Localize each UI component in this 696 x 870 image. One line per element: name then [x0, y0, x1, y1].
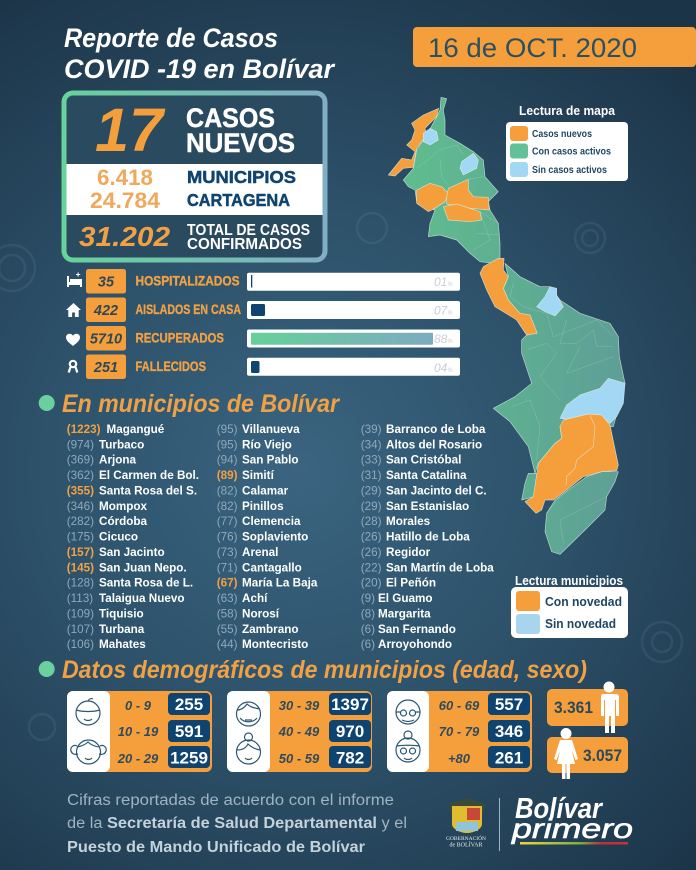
- list: municipality column 1: Mompox: [99, 500, 148, 513]
- row: recuperados: [86, 326, 460, 350]
- municipios and cartagena numbers: 6.418: [97, 165, 153, 190]
- list: municipality column 3: (28): [361, 515, 382, 528]
- row: fallecidos: 04%: [434, 361, 453, 375]
- panel: ages 60+: 70 - 79: [439, 724, 480, 739]
- list: municipality column 3: Regidor: [386, 546, 431, 559]
- row: fallecidos: 251: [93, 360, 118, 376]
- panel: ages 30-59: 30 - 39: [279, 698, 320, 713]
- icon: boy face: [76, 699, 100, 725]
- panel: men total: [547, 682, 628, 733]
- footer note: Puesto de Mando Unificado de Bolívar: [67, 839, 365, 856]
- list: municipality column 1: (175): [67, 531, 94, 544]
- logo: Bolívar Primero: primero: [511, 813, 633, 844]
- list: municipality column 2: (89): [217, 469, 238, 482]
- list: municipality column 3: San Estanislao: [386, 500, 469, 513]
- list: municipality column 3: (9): [361, 592, 375, 605]
- list: municipality column 1: Arjona: [99, 454, 137, 467]
- list: municipality column 3: Morales: [386, 515, 431, 528]
- legend: municipios: Con novedad: [545, 594, 622, 609]
- list: municipality column 2: Clemencia: [242, 515, 301, 528]
- list: municipality column 3: (39): [361, 423, 382, 436]
- list: municipality column 2: María La Baja: [242, 577, 318, 590]
- row: aislados en casa: AISLADOS EN CASA: [136, 302, 241, 317]
- row: recuperados: 5710: [90, 332, 122, 348]
- list: municipality column 2: San Pablo: [242, 454, 299, 467]
- list: municipality column 1: San Jacinto: [99, 546, 165, 559]
- title: COVID -19 en Bolívar: [64, 54, 335, 84]
- panel: women total: [547, 728, 628, 779]
- list: municipality column 1: Turbaco: [99, 438, 144, 451]
- panel: ages 60+: 60 - 69: [439, 698, 480, 713]
- list: municipality column 3: (29): [361, 500, 382, 513]
- list: municipality column 2: Río Viejo: [242, 438, 292, 451]
- panel: status rows: [66, 269, 460, 379]
- heading: datos demográficos: Datos demográficos de municipios (edad, sexo): [62, 656, 587, 684]
- icon: bed: [67, 272, 82, 287]
- list: municipality column 3: (34): [361, 438, 382, 451]
- legend: map: Lectura de mapa: [519, 104, 616, 118]
- logo: gobernación de Bolívar: GOBERNACIÓN: [446, 834, 486, 842]
- list: municipality column 2: (76): [217, 531, 238, 544]
- list: municipality column 1: (282): [67, 515, 94, 528]
- list: municipality column 2: (82): [217, 484, 238, 498]
- list: municipality column 1: Santa Rosa de L.: [99, 577, 193, 590]
- list: municipality column 1: Mahates: [99, 638, 146, 651]
- logo: gobernación de Bolívar: de BOLÍVAR: [449, 840, 483, 848]
- panel: men total: 3.361: [554, 698, 593, 717]
- list: municipality column 3: San Fernando: [378, 623, 456, 636]
- list: municipality column 2: (67): [217, 577, 238, 590]
- list: municipality column 1: (369): [67, 454, 94, 467]
- logo: Bolívar Primero: [511, 793, 633, 844]
- list: municipality column 3: Arroyohondo: [378, 638, 452, 651]
- list: municipality column 1: (362): [67, 469, 94, 482]
- municipios and cartagena labels: MUNICIPIOS: [187, 167, 296, 187]
- panel: ages 30-59: 50 - 59: [279, 751, 320, 766]
- panel: ages 0-29: 591: [175, 722, 203, 741]
- row: recuperados: RECUPERADOS: [136, 330, 224, 346]
- icon: man: [601, 682, 619, 733]
- list: municipality column 2: (58): [217, 607, 238, 620]
- list: municipality column 3: (31): [361, 469, 382, 482]
- row: aislados en casa: 07%: [434, 304, 453, 318]
- list: municipality column 1: (113): [67, 592, 93, 605]
- panel: ages 60+: +80: [448, 751, 471, 766]
- legend: municipios: Lectura municipios: [515, 574, 623, 588]
- panel: ages 60+: 557: [495, 695, 523, 714]
- list: municipality column 2: Montecristo: [242, 638, 308, 651]
- panel: ages 60+: 346: [495, 722, 523, 741]
- new cases label: NUEVOS: [186, 128, 295, 158]
- list: municipality column 3: (26): [361, 546, 382, 559]
- date banner: 16 de OCT. 2020: [428, 33, 637, 63]
- logo: Bolívar Primero: Bolívar: [515, 793, 604, 825]
- list: municipality column 2: (95): [217, 423, 238, 436]
- title: [64, 23, 335, 84]
- list: municipality column 1: Magangué: [106, 423, 165, 436]
- list: municipality column 1: [67, 423, 199, 651]
- legend: map: [506, 104, 628, 181]
- title: Reporte de Casos: [64, 23, 278, 53]
- row: aislados en casa: [86, 298, 460, 322]
- panel: ages 0-29: 255: [175, 695, 203, 714]
- date banner: [413, 27, 696, 67]
- panel: ages 60+: [387, 691, 532, 772]
- panel: ages 0-29: [67, 691, 212, 772]
- list: municipality column 2: (94): [217, 454, 238, 467]
- list: municipality column 1: Talaigua Nuevo: [99, 592, 185, 605]
- list: municipality column 3: San Martín de Loba: [386, 561, 494, 574]
- list: municipality column 1: (128): [67, 577, 94, 590]
- list: municipality column 1: (355): [67, 484, 94, 498]
- list: municipality column 1: Córdoba: [99, 515, 148, 528]
- list: municipality column 3: Barranco de Loba: [386, 423, 486, 436]
- list: municipality column 1: (109): [67, 607, 94, 620]
- row: hospitalizados: 35: [98, 274, 115, 290]
- list: municipality column 2: (71): [217, 561, 238, 574]
- list: municipality column 2: (77): [217, 515, 238, 528]
- list: municipality column 1: Cicuco: [99, 531, 138, 544]
- footer note: [67, 792, 407, 856]
- list: municipality column 3: (22): [361, 561, 382, 574]
- row: aislados en casa: 422: [93, 303, 118, 319]
- logo: gobernación de Bolívar: [446, 798, 486, 848]
- list: municipality column 3: (20): [361, 577, 382, 590]
- list: municipality column 1: (106): [67, 638, 94, 651]
- list: municipality column 1: (157): [67, 546, 94, 559]
- list: municipality column 3: [361, 423, 494, 651]
- panel: ages 60+: 261: [495, 748, 523, 768]
- row: fallecidos: [86, 354, 460, 379]
- list: municipality column 1: El Carmen de Bol.: [99, 469, 199, 482]
- list: municipality column 2: Cantagallo: [242, 561, 302, 574]
- footer note: de la Secretaría de Salud Departamental y el: [67, 815, 407, 832]
- municipios and cartagena numbers: 24.784: [90, 188, 161, 213]
- new cases number: 17: [95, 96, 166, 164]
- legend: map: Sin casos activos: [532, 164, 607, 176]
- list: municipality column 3: Santa Catalina: [386, 469, 467, 482]
- panel: ages 30-59: 782: [336, 748, 364, 768]
- row: recuperados: 88%: [434, 332, 453, 346]
- list: municipality column 2: Villanueva: [242, 423, 300, 436]
- heading: en municipios: En municipios de Bolívar: [62, 390, 340, 418]
- panel: ages 30-59: 970: [336, 722, 364, 741]
- row: fallecidos: FALLECIDOS: [136, 359, 206, 374]
- panel: case totals: [64, 93, 325, 260]
- new cases label: CASOS: [186, 103, 275, 133]
- list: municipality column 1: San Juan Nepo.: [99, 561, 187, 574]
- row: hospitalizados: [86, 269, 460, 294]
- total number: 31.202: [79, 221, 170, 252]
- icon: older man face: [396, 700, 420, 724]
- municipios and cartagena labels: CARTAGENA: [187, 190, 290, 210]
- row: hospitalizados: HOSPITALIZADOS: [136, 274, 240, 289]
- list: municipality column 2: Calamar: [242, 484, 289, 498]
- list: municipality column 2: [217, 423, 318, 651]
- legend: municipios: Sin novedad: [545, 616, 616, 631]
- list: municipality column 2: (44): [217, 638, 238, 651]
- panel: ages 0-29: 10 - 19: [118, 724, 159, 739]
- list: municipality column 3: (8): [361, 607, 375, 620]
- list: municipality column 2: Achí: [242, 592, 268, 605]
- list: municipality column 2: (63): [217, 592, 238, 605]
- icon: adult man face: [236, 702, 260, 726]
- list: municipality column 3: (6): [361, 638, 375, 651]
- panel: ages 30-59: 1397: [331, 695, 369, 714]
- legend: map: Casos nuevos: [532, 128, 592, 140]
- list: municipality column 2: (95): [217, 438, 238, 451]
- icon: woman: [554, 728, 578, 779]
- list: municipality column 1: (346): [67, 500, 94, 513]
- panel: women total: 3.057: [583, 746, 622, 765]
- list: municipality column 1: Turbana: [99, 623, 145, 636]
- list: municipality column 3: Margarita: [378, 607, 431, 620]
- list: municipality column 1: (107): [67, 623, 94, 636]
- list: municipality column 2: Arenal: [242, 546, 278, 559]
- panel: ages 30-59: 40 - 49: [278, 724, 320, 739]
- list: municipality column 2: (73): [217, 546, 238, 559]
- list: municipality column 3: (6): [361, 623, 375, 636]
- list: municipality column 1: Tiquisio: [99, 607, 144, 620]
- new cases label: [186, 103, 295, 158]
- icon: older woman face: [396, 731, 420, 762]
- legend: municipios: [511, 574, 628, 638]
- list: municipality column 3: (33): [361, 454, 382, 467]
- icon: adult woman face: [236, 733, 260, 764]
- panel: ages 30-59: [227, 691, 372, 772]
- map of Bolívar: [388, 97, 625, 554]
- list: municipality column 2: (82): [217, 500, 238, 513]
- icon: heart: [66, 334, 80, 346]
- total label: [187, 222, 310, 253]
- list: municipality column 2: Simití: [242, 469, 275, 482]
- panel: ages 0-29: 0 - 9: [125, 698, 152, 713]
- list: municipality column 2: Zambrano: [242, 623, 298, 636]
- row: hospitalizados: 01%: [434, 275, 453, 289]
- list: municipality column 1: (145): [67, 561, 94, 574]
- list: municipality column 1: (974): [67, 438, 94, 451]
- list: municipality column 3: San Cristóbal: [386, 454, 461, 467]
- icon: girl face: [71, 740, 106, 764]
- list: municipality column 3: (26): [361, 531, 382, 544]
- panel: ages 0-29: 20 - 29: [117, 751, 159, 766]
- list: municipality column 2: Norosí: [242, 607, 280, 620]
- municipios and cartagena numbers: [90, 165, 161, 213]
- list: municipality column 3: (29): [361, 484, 382, 498]
- list: municipality column 3: Hatillo de Loba: [386, 531, 470, 544]
- panel: ages 0-29: 1259: [170, 748, 208, 768]
- municipios and cartagena labels: [187, 167, 296, 210]
- list: municipality column 1: Santa Rosa del S.: [99, 484, 197, 498]
- legend: map: Con casos activos: [532, 146, 611, 158]
- list: municipality column 2: Soplaviento: [242, 531, 308, 544]
- list: municipality column 3: San Jacinto del C.: [386, 484, 487, 498]
- icon: house: [66, 303, 81, 317]
- total label: CONFIRMADOS: [187, 236, 302, 253]
- list: municipality column 3: El Peñón: [386, 577, 436, 590]
- list: municipality column 2: Pinillos: [242, 500, 284, 513]
- total label: TOTAL DE CASOS: [187, 222, 310, 239]
- icon: ribbon: [69, 361, 77, 372]
- list: municipality column 3: El Guamo: [378, 592, 433, 605]
- list: municipality column 2: (55): [217, 623, 238, 636]
- list: municipality column 1: (1223): [67, 423, 101, 436]
- footer note: Cifras reportadas de acuerdo con el informe: [67, 792, 394, 809]
- list: municipality column 3: Altos del Rosario: [386, 438, 482, 451]
